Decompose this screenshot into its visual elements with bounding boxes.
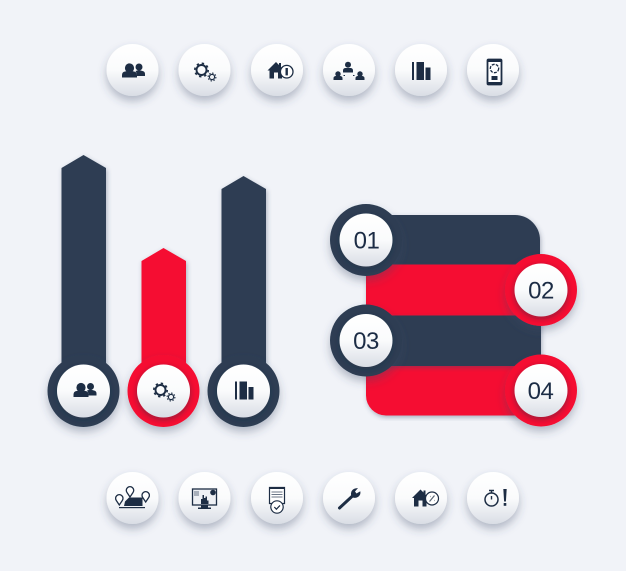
icon: people	[106, 44, 158, 96]
step 4 badge: 04	[528, 378, 553, 405]
step 2 badge	[505, 254, 577, 326]
icon: bar columns	[395, 44, 447, 96]
icon: certificate with check	[251, 472, 303, 524]
top icon row	[106, 44, 519, 96]
icon: wrench	[323, 472, 375, 524]
icon: team network	[323, 44, 375, 96]
bar 2: red arrow with gears icon	[128, 248, 200, 427]
icon: stopwatch alert	[467, 472, 519, 524]
bar 1: navy arrow with people icon	[48, 155, 120, 427]
step 1 badge: 01	[354, 228, 379, 254]
icon: monitor with chart	[178, 472, 230, 524]
numbered steps panel	[330, 204, 577, 426]
icon: smartphone	[467, 44, 519, 96]
icon: delivery van route	[106, 472, 158, 524]
bottom icon row	[106, 472, 519, 524]
step 2 band	[366, 264, 541, 316]
bar 3: navy arrow with columns icon	[208, 176, 280, 427]
icon: gears	[178, 44, 230, 96]
icon: house with percent badge	[395, 472, 447, 524]
step 2 badge: 02	[528, 278, 554, 304]
step 1 badge	[330, 204, 402, 276]
step 4 band	[366, 365, 541, 416]
step 3 badge	[330, 304, 402, 376]
step 4 badge	[505, 354, 577, 426]
icon: house with info badge	[251, 44, 303, 96]
step 3 band	[366, 316, 541, 366]
step 3 badge: 03	[353, 328, 379, 355]
vertical arrow chart	[48, 155, 280, 427]
step 1 band	[366, 215, 540, 266]
